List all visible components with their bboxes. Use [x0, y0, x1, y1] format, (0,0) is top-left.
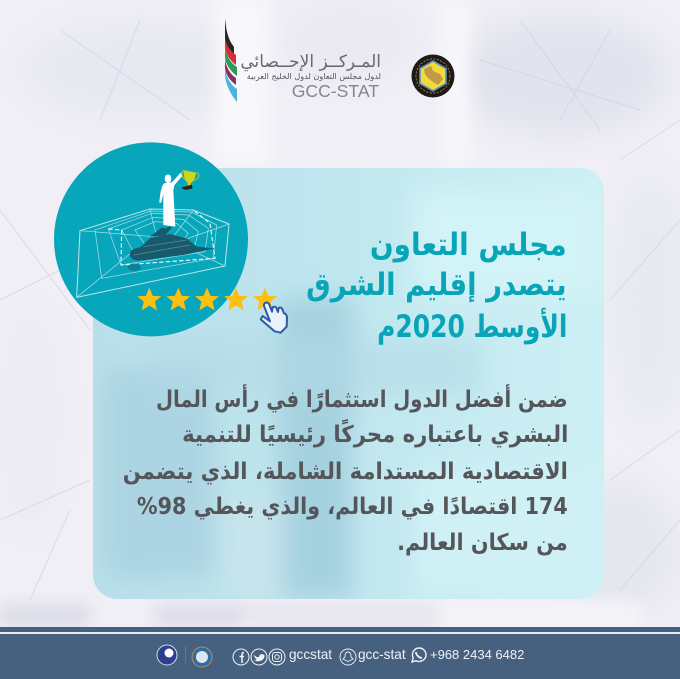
handle gccstat: gccstat [289, 647, 332, 662]
heading: مجلس التعاون [370, 227, 567, 263]
star rating [137, 288, 277, 310]
icon: snapchat [340, 648, 356, 666]
heading [307, 227, 567, 345]
illustration: teal circle with winner on radar chart [54, 142, 288, 336]
icon: pointing hand cursor [261, 303, 287, 333]
radar dashed outline [108, 210, 215, 265]
dark shadow mound [128, 227, 214, 271]
icon: whatsapp [411, 647, 427, 663]
body text: ضمن أفضل الدول استثمارًا في رأس المال [156, 387, 568, 413]
handle gcc-stat: gcc-stat [358, 647, 406, 662]
logo GCC-STAT text: GCC-STAT [292, 81, 379, 101]
icon: certification badges [156, 644, 212, 668]
footer bar [0, 627, 680, 679]
heading: الأوسط 2020م [377, 309, 567, 345]
logo Arabic name: المـركــز الإحــصائي [240, 52, 381, 72]
phone number: +968 2434 6482 [430, 647, 524, 662]
figure in white robe [159, 173, 183, 227]
icon: GCC emblem [412, 54, 454, 98]
logo Arabic subtitle: لدول مجلس التعاون لدول الخليج العربية [247, 71, 381, 81]
heading: يتصدر إقليم الشرق [307, 267, 567, 303]
panel: content background [93, 168, 604, 599]
body text: 174 اقتصادًا في العالم، والذي يغطي 98% [137, 494, 568, 520]
body text [123, 384, 568, 556]
icon: coloured ribbon mark [225, 18, 237, 102]
body text: من سكان العالم. [397, 530, 568, 556]
teal circle [54, 142, 248, 336]
icon: trophy [182, 170, 199, 190]
icons: facebook twitter instagram [232, 648, 286, 666]
body text: الاقتصادية المستدامة الشاملة، الذي يتضمن [123, 459, 568, 485]
social handles row [232, 647, 524, 666]
radar chart grid [77, 209, 229, 297]
logo: GCC-STAT [225, 18, 381, 102]
body text: البشري باعتباره محركًا رئيسيًا للتنمية [182, 422, 568, 448]
